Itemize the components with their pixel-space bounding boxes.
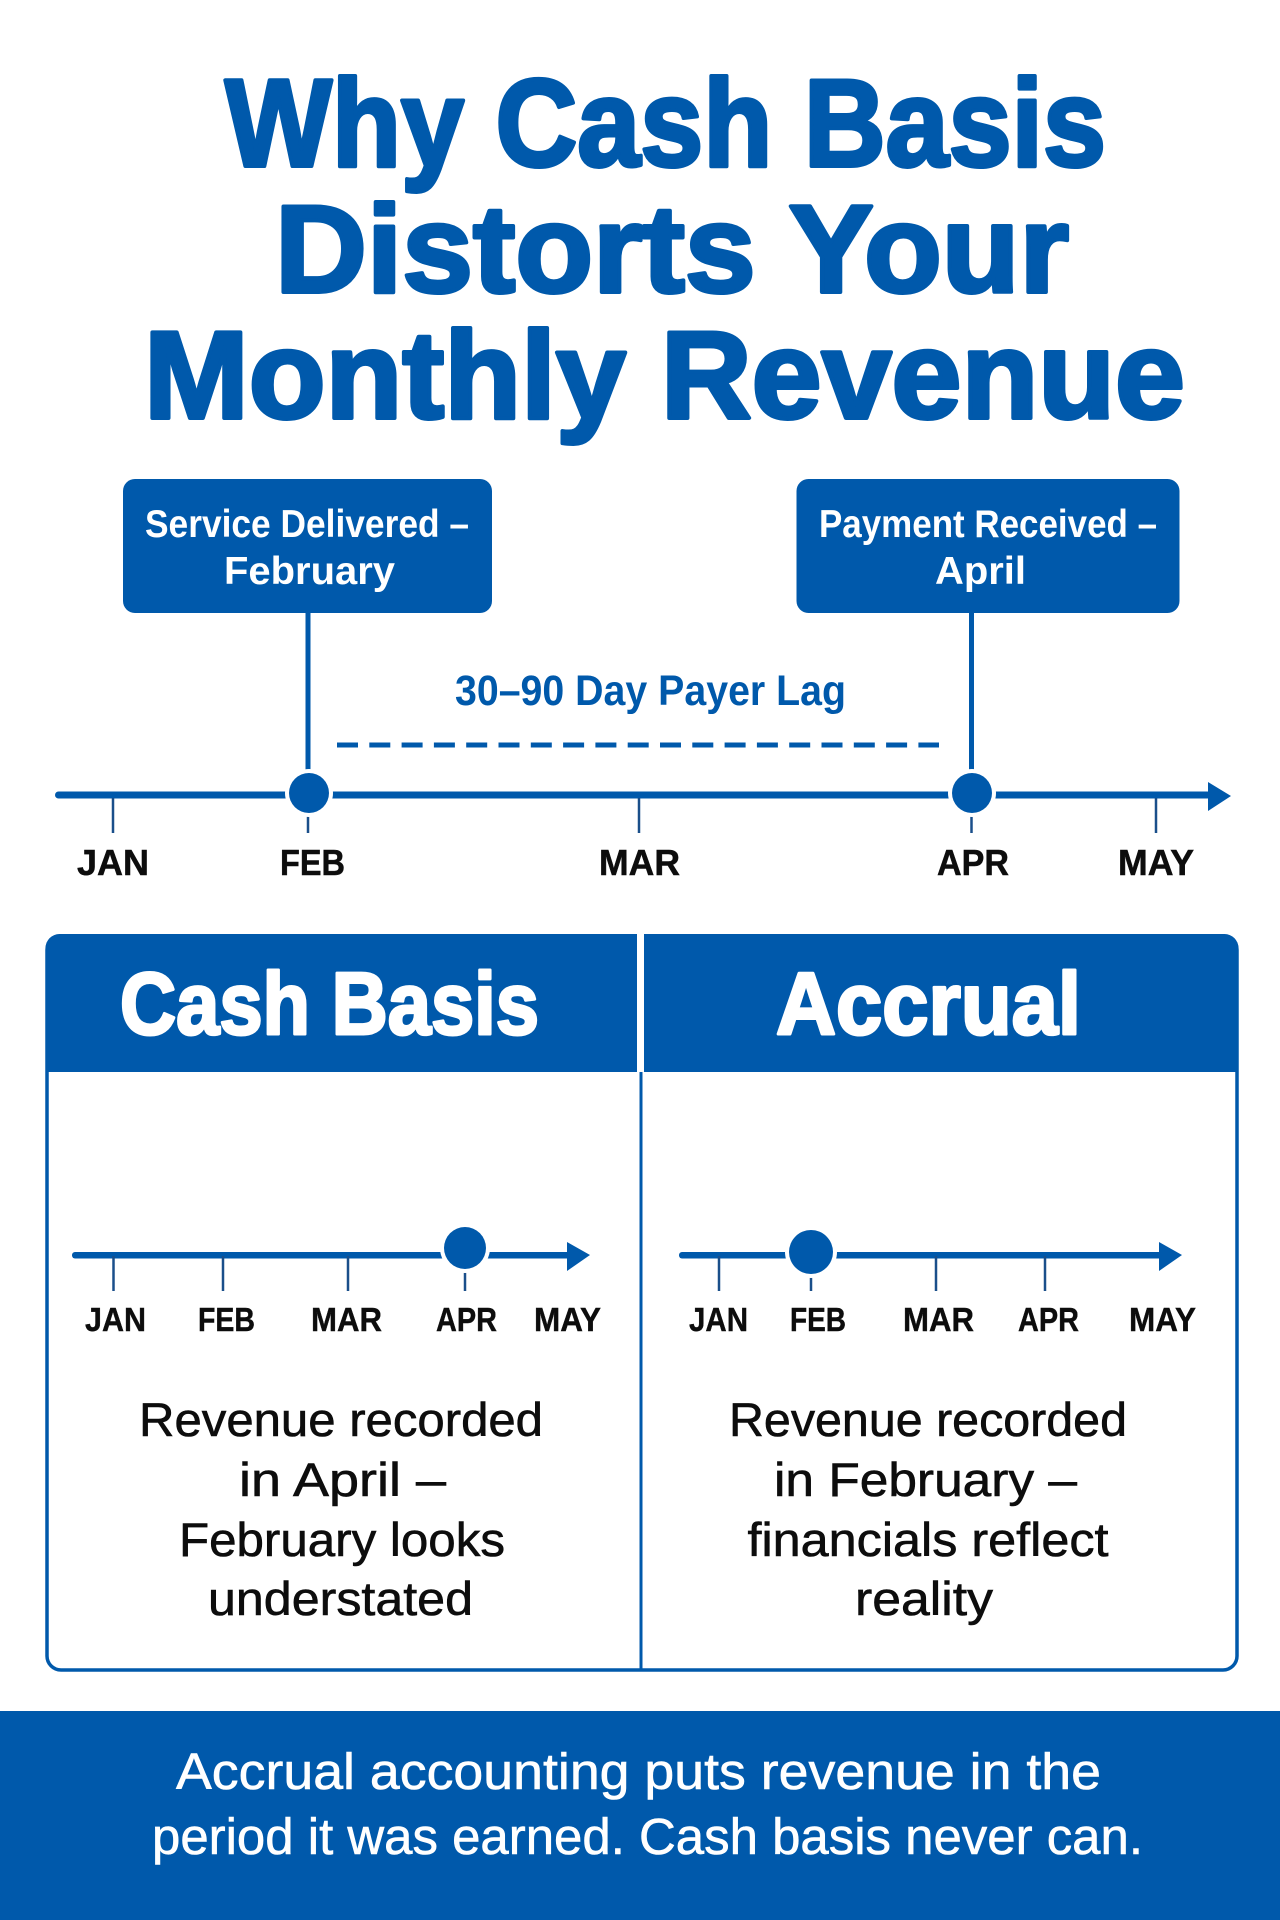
header divider bbox=[637, 934, 644, 1072]
marker: February bbox=[285, 769, 333, 817]
cash basis description: understated bbox=[208, 1572, 473, 1625]
cash basis description: February looks bbox=[179, 1513, 505, 1566]
marker: April dot bbox=[952, 773, 992, 813]
title: Monthly Revenue bbox=[144, 307, 1185, 445]
cash basis mini timeline: MAR bbox=[311, 1301, 382, 1338]
lag dashed line bbox=[337, 742, 939, 748]
month labels: MAR bbox=[599, 842, 680, 883]
callout: payment received: Payment Received – bbox=[819, 503, 1157, 546]
accrual mini timeline: APR bbox=[1018, 1301, 1079, 1338]
month labels bbox=[77, 842, 1194, 883]
footer banner: Accrual accounting puts revenue in the bbox=[176, 1743, 1101, 1800]
accrual mini timeline: FEB bbox=[790, 1301, 846, 1338]
cash basis description bbox=[139, 1393, 543, 1625]
callout: service delivered: Service Delivered – bbox=[145, 503, 469, 546]
title bbox=[144, 55, 1185, 445]
title: Distorts Your bbox=[275, 181, 1069, 319]
footer banner: period it was earned. Cash basis never can. bbox=[152, 1808, 1143, 1865]
accrual mini timeline bbox=[679, 1226, 1196, 1338]
lag label: 30–90 Day Payer Lag bbox=[455, 667, 846, 715]
accrual description: reality bbox=[855, 1572, 994, 1625]
callout: payment received bbox=[796, 479, 1180, 613]
heading: Accrual: Accrual bbox=[776, 954, 1081, 1053]
callout: service delivered: February bbox=[224, 550, 395, 593]
table header background bbox=[46, 934, 1238, 1072]
accrual description: financials reflect bbox=[748, 1513, 1108, 1566]
cash basis description: Revenue recorded bbox=[139, 1393, 543, 1446]
cash basis mini timeline: FEB bbox=[198, 1301, 255, 1338]
main timeline bbox=[55, 610, 1231, 883]
month labels: APR bbox=[937, 842, 1009, 883]
footer banner bbox=[0, 1711, 1280, 1920]
cash basis mini timeline bbox=[72, 1223, 601, 1338]
cash basis mini timeline: JAN bbox=[85, 1301, 146, 1338]
connector lines bbox=[308, 610, 972, 790]
accrual mini timeline: MAR bbox=[903, 1301, 974, 1338]
title: Why Cash Basis bbox=[225, 55, 1106, 193]
accrual description bbox=[729, 1393, 1127, 1625]
marker: April bbox=[948, 769, 996, 817]
callout: payment received: April bbox=[935, 550, 1026, 593]
accrual description: in February – bbox=[774, 1453, 1078, 1506]
accrual description: Revenue recorded bbox=[729, 1393, 1127, 1446]
callout: service delivered bbox=[123, 479, 492, 613]
accrual mini timeline: MAY bbox=[1129, 1301, 1196, 1338]
heading: Cash Basis: Cash Basis bbox=[120, 954, 539, 1053]
cash basis mini timeline: MAY bbox=[534, 1301, 601, 1338]
month labels: JAN bbox=[77, 842, 149, 883]
marker: February dot bbox=[289, 773, 329, 813]
month labels: FEB bbox=[280, 842, 345, 883]
comparison table bbox=[46, 934, 1238, 1670]
cash basis mini timeline: APR bbox=[436, 1301, 497, 1338]
column divider bbox=[640, 1072, 642, 1670]
cash basis description: in April – bbox=[239, 1453, 447, 1506]
accrual mini timeline: JAN bbox=[689, 1301, 748, 1338]
timeline axis with arrow bbox=[55, 782, 1231, 811]
table frame bbox=[47, 936, 1237, 1670]
month labels: MAY bbox=[1118, 842, 1194, 883]
tick marks bbox=[113, 798, 1156, 833]
